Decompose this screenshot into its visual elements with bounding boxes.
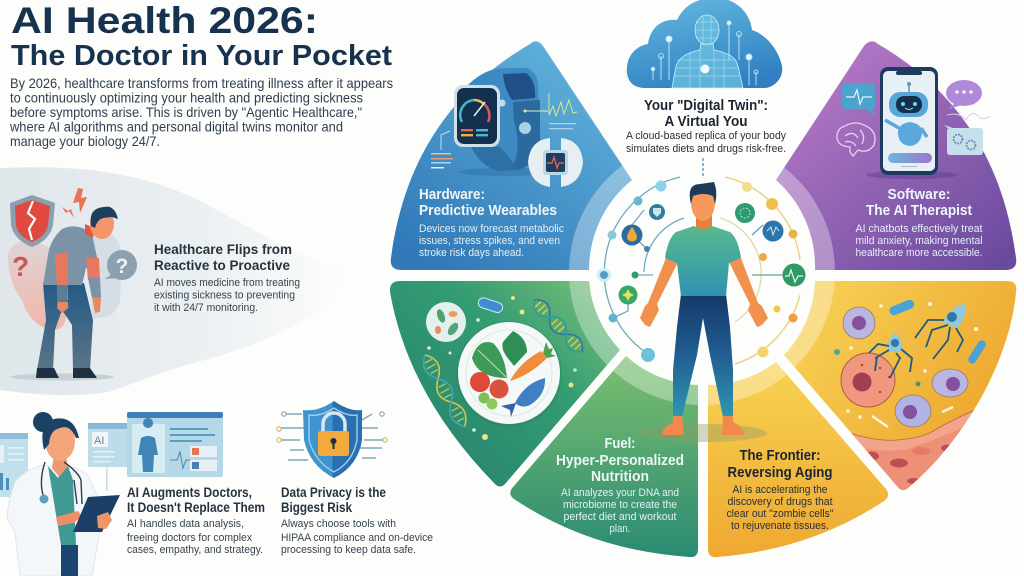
figure shoes bbox=[36, 368, 97, 378]
icon: red question mark: ? bbox=[12, 251, 29, 282]
heading: Fuel: bbox=[604, 435, 636, 452]
cells bbox=[841, 307, 968, 427]
text: data privacy: Biggest Risk bbox=[281, 500, 352, 515]
circuit lines bbox=[651, 21, 758, 85]
icon: smartwatch bbox=[454, 68, 551, 176]
icon: bacteria bbox=[834, 298, 987, 365]
doctor arm bbox=[56, 511, 82, 526]
grid lines bbox=[674, 16, 740, 88]
neck bbox=[696, 212, 712, 229]
icon: security shield with padlock bbox=[277, 401, 387, 478]
doctor scrubs bbox=[48, 466, 76, 545]
heading: Hardware: bbox=[419, 186, 485, 203]
body: mild anxiety, making mental bbox=[856, 235, 982, 247]
text: augments doctors: freeing doctors for complex bbox=[127, 532, 252, 544]
figure arms bbox=[55, 252, 101, 313]
gauge bbox=[460, 100, 474, 122]
panel: hardware predictive wearables: Predictive Wearables bbox=[419, 202, 557, 219]
body bbox=[856, 223, 982, 259]
icon: smartphone with robot bbox=[880, 67, 938, 175]
icon: nanobots bbox=[869, 304, 966, 378]
cloud: digital twin bbox=[627, 0, 782, 88]
panel: frontier reversing aging bbox=[708, 362, 888, 557]
wireframe person bbox=[672, 15, 743, 88]
doctor coat bbox=[7, 465, 104, 576]
icon: wearable patch bbox=[528, 138, 583, 187]
screen: AI window bbox=[88, 423, 133, 491]
body: stroke risk days ahead. bbox=[419, 247, 524, 259]
doctor hand bbox=[97, 512, 112, 529]
intro text: manage your biology 24/7. bbox=[10, 133, 160, 149]
text: healthcare flips: Reactive to Proactive bbox=[154, 258, 290, 273]
text: digital twin: A Virtual You bbox=[664, 114, 748, 130]
icon: DNA helix left bbox=[419, 352, 471, 430]
body: microbiome to create the bbox=[563, 499, 677, 511]
ground shadow bbox=[10, 374, 114, 380]
icon: water drop badge bbox=[622, 224, 642, 246]
body: AI is accelerating the bbox=[732, 484, 828, 496]
intro text: By 2026, healthcare transforms from treating illness after it appears bbox=[10, 75, 393, 91]
text: augments doctors: cases, empathy, and strategy. bbox=[127, 544, 263, 556]
icon: microbiome dish bbox=[426, 302, 466, 342]
legs bbox=[673, 294, 733, 417]
icon: nerve badge bbox=[762, 220, 784, 242]
panel: hardware predictive wearables bbox=[391, 41, 632, 270]
intro text: before symptoms arise. This is driven by "Agentic Healthcare," bbox=[10, 104, 362, 120]
illustration: sick person with broken shield bbox=[8, 188, 137, 380]
doctor head bbox=[45, 421, 75, 461]
head bbox=[691, 185, 715, 221]
intro text bbox=[9, 75, 393, 149]
sparkles bbox=[846, 302, 978, 427]
body: discovery of drugs that bbox=[728, 496, 832, 508]
phone shadow bbox=[866, 171, 958, 179]
icon: bacterium bbox=[477, 297, 504, 314]
panel: fuel hyper-personalized nutrition bbox=[510, 356, 698, 557]
screen: left chart window bbox=[0, 433, 28, 497]
text: healthcare flips bbox=[154, 242, 300, 314]
text: healthcare flips: AI moves medicine from treating bbox=[154, 277, 300, 289]
tissue layer bbox=[851, 410, 974, 490]
text: data privacy: Data Privacy is the bbox=[281, 485, 386, 500]
doctor bun bbox=[33, 412, 53, 432]
text: data privacy: HIPAA compliance and on-device bbox=[281, 532, 433, 544]
title: AI Health 2026: bbox=[11, 0, 318, 41]
nodes: orbit dots bbox=[597, 180, 798, 362]
body: AI chatbots effectively treat bbox=[856, 223, 982, 235]
heading: The Frontier: bbox=[740, 448, 820, 464]
text: data privacy: processing to keep data safe. bbox=[281, 544, 416, 556]
panel: software AI therapist bbox=[776, 41, 1016, 270]
panel: reactive background blob bbox=[0, 167, 350, 395]
text: healthcare flips: Healthcare Flips from bbox=[154, 242, 292, 257]
feet bbox=[662, 416, 744, 435]
illustration: doctor with AI screens bbox=[0, 412, 223, 576]
text: healthcare flips: it with 24/7 monitoring. bbox=[154, 302, 258, 314]
icon: leaf badge bbox=[618, 286, 638, 304]
icon: pain bolts bbox=[62, 188, 87, 218]
body bbox=[726, 484, 834, 532]
hair bbox=[690, 182, 716, 204]
text: augments doctors: AI Augments Doctors, bbox=[127, 485, 252, 500]
strap outer bbox=[468, 68, 540, 171]
icon: question speech bubble: ? bbox=[116, 255, 128, 278]
icon: DNA helix right bbox=[529, 295, 588, 357]
body: to rejuvenate tissues. bbox=[731, 520, 829, 532]
icon: food plate bbox=[456, 321, 562, 427]
title bbox=[11, 0, 393, 72]
screen: patient window bbox=[127, 412, 223, 477]
text: augments doctors: AI handles data analysis, bbox=[127, 518, 244, 530]
stethoscope bbox=[41, 462, 82, 504]
figure: central person bbox=[640, 182, 768, 435]
text: augments doctors: It Doesn't Replace Them bbox=[127, 500, 265, 515]
icon: brain bbox=[837, 123, 875, 156]
icon: gears bubble bbox=[944, 125, 983, 155]
tablet bbox=[73, 495, 120, 532]
body: Devices now forecast metabolic bbox=[419, 223, 564, 235]
panel: cells illustration wedge bbox=[784, 281, 1016, 500]
intro text: where AI algorithms and personal digital twins monitor and bbox=[9, 118, 343, 134]
case bbox=[454, 85, 500, 147]
body: healthcare more accessible. bbox=[856, 247, 982, 259]
figure legs bbox=[37, 283, 93, 370]
panel: frontier reversing aging: Reversing Aging bbox=[728, 465, 832, 481]
doctor hair bbox=[42, 418, 79, 450]
icon: shield badge bbox=[649, 204, 665, 220]
figure head bbox=[90, 209, 114, 239]
title: The Doctor in Your Pocket bbox=[11, 40, 393, 72]
grey aura bbox=[90, 231, 122, 318]
body: AI analyzes your DNA and bbox=[561, 487, 679, 499]
icon: pulse speech bubble bbox=[842, 83, 875, 115]
text: data privacy bbox=[281, 485, 433, 556]
text: healthcare flips: existing sickness to preventing bbox=[154, 290, 295, 302]
text: augments doctors bbox=[127, 485, 265, 556]
chart: heart-rate lines bbox=[431, 93, 577, 168]
strap inner back bbox=[503, 73, 535, 100]
body: clear out "zombie cells" bbox=[726, 508, 834, 520]
icon: heartbeat badge bbox=[782, 264, 806, 286]
panel: software AI therapist: The AI Therapist bbox=[866, 202, 972, 219]
pink aura bbox=[8, 241, 66, 330]
strap lower front bbox=[471, 147, 518, 171]
heading: Software: bbox=[888, 186, 950, 203]
body: issues, stress spikes, and even bbox=[419, 235, 560, 247]
sparkle dots bbox=[427, 296, 577, 440]
connector: dotted line bbox=[702, 158, 704, 176]
shirt bbox=[665, 226, 741, 296]
text: data privacy: Always choose tools with bbox=[281, 518, 396, 530]
figure neck bbox=[85, 224, 94, 238]
panel: nutrition illustration wedge bbox=[390, 281, 620, 486]
screen: AI window: AI bbox=[94, 435, 104, 447]
text: digital twin bbox=[626, 98, 786, 155]
figure torso bbox=[43, 226, 98, 285]
orbit rings bbox=[604, 177, 800, 364]
text: digital twin: simulates diets and drugs risk-free. bbox=[626, 143, 786, 155]
body: plan. bbox=[610, 523, 630, 535]
text: digital twin: Your "Digital Twin": bbox=[644, 98, 768, 114]
body: perfect diet and workout bbox=[564, 511, 676, 523]
icon: broken shield bbox=[10, 195, 55, 247]
body bbox=[419, 223, 564, 259]
panel: fuel hyper-personalized nutrition: Nutrition bbox=[591, 468, 649, 485]
figure hair bbox=[91, 207, 118, 228]
body bbox=[561, 487, 679, 535]
text: digital twin: A cloud-based replica of your body bbox=[626, 130, 786, 142]
intro text: to continuously optimizing your health and predicting sickness bbox=[10, 90, 363, 106]
light inner band bbox=[580, 150, 824, 394]
panel: fuel hyper-personalized nutrition: Hyper-Personalized bbox=[556, 452, 684, 469]
arms bbox=[640, 258, 768, 327]
squiggle bbox=[947, 113, 990, 120]
icon: sprout badge bbox=[735, 203, 755, 223]
shadow under figure bbox=[639, 424, 767, 442]
doctor neck bbox=[52, 455, 68, 478]
icon: message bubble bbox=[946, 80, 982, 109]
icon: question speech bubble bbox=[105, 250, 137, 280]
